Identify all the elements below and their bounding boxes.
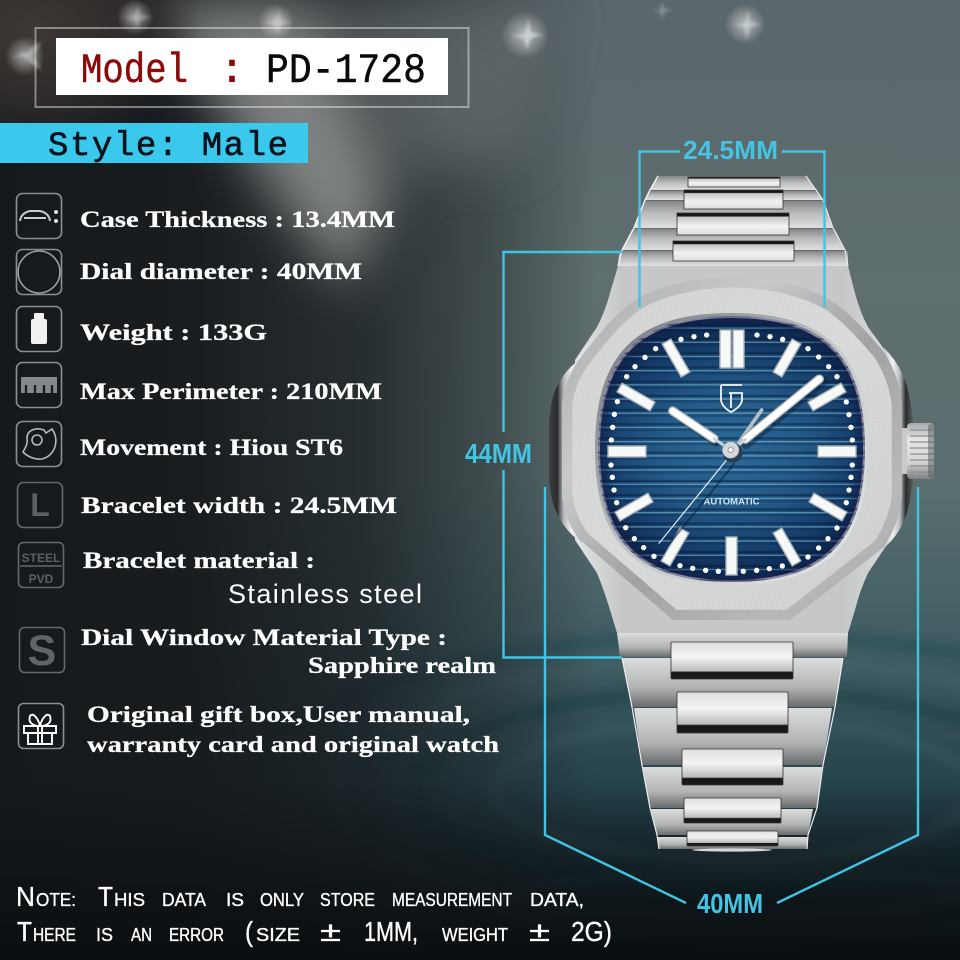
measurement note: 1MM, bbox=[364, 916, 418, 947]
24.5mm bracelet width dimension bbox=[640, 135, 824, 307]
measurement note: OTE: bbox=[36, 890, 76, 910]
measurement note: SIZE bbox=[256, 925, 300, 945]
model label: Model bbox=[81, 47, 188, 95]
icon: steel pvd: PVD bbox=[29, 572, 54, 586]
spec: bracelet material bbox=[18, 542, 422, 609]
measurement note: AN bbox=[131, 925, 152, 945]
icon: weight bbox=[16, 306, 62, 352]
spec: max perimeter: Max Perimeter : 210MM bbox=[80, 379, 382, 404]
spec: bracelet width: Bracelet width : 24.5MM bbox=[81, 493, 397, 518]
44mm case length dimension: 44MM bbox=[465, 438, 532, 469]
measurement note: ± bbox=[320, 916, 341, 947]
spec: case thickness: Case Thickness : 13.4MM bbox=[80, 207, 395, 232]
spec: package contents: warranty card and original watch bbox=[87, 732, 499, 757]
icon: steel pvd: STEEL bbox=[22, 551, 60, 565]
automatic label: AUTOMATIC bbox=[704, 496, 760, 508]
spec: package contents bbox=[18, 702, 499, 757]
icon: movement bbox=[16, 422, 62, 466]
measurement note: ONLY bbox=[260, 890, 304, 910]
spec: bracelet material: Bracelet material : bbox=[83, 548, 315, 573]
spec: dial diameter: Dial diameter : 40MM bbox=[80, 259, 362, 284]
bezel bbox=[562, 277, 902, 620]
style banner: Style: Male bbox=[48, 128, 288, 166]
spec: package contents: Original gift box,User manual, bbox=[87, 702, 470, 727]
measurement note bbox=[16, 881, 612, 947]
icon: sapphire bbox=[20, 627, 64, 675]
spec: bracelet width bbox=[18, 482, 397, 528]
measurement note: HERE bbox=[33, 925, 76, 945]
star glints bbox=[5, 0, 765, 76]
style banner bbox=[0, 123, 308, 166]
44mm case length dimension bbox=[465, 252, 622, 658]
measurement note: N bbox=[16, 881, 35, 912]
40mm case width dimension: 40MM bbox=[697, 888, 763, 919]
upper bracelet bbox=[618, 176, 848, 266]
measurement note: 2G) bbox=[571, 916, 612, 947]
icon: bracelet width: L bbox=[30, 487, 50, 523]
icon: ruler bbox=[16, 362, 62, 408]
icon: case thickness bbox=[16, 194, 62, 238]
spec: weight: Weight : 133G bbox=[80, 320, 267, 345]
spec: max perimeter bbox=[16, 362, 382, 408]
minute dots bbox=[608, 332, 855, 574]
hour markers bbox=[608, 330, 856, 575]
model label: : bbox=[220, 47, 244, 95]
watch bbox=[549, 176, 934, 852]
spec: case thickness bbox=[16, 194, 395, 238]
spec: movement: Movement : Hiou ST6 bbox=[80, 435, 343, 460]
measurement note: T bbox=[17, 916, 32, 947]
measurement note: HIS bbox=[114, 890, 145, 910]
spec: dial window material bbox=[20, 625, 496, 678]
24.5mm bracelet width dimension: 24.5MM bbox=[683, 135, 778, 165]
model label: PD-1728 bbox=[266, 47, 426, 95]
lower bracelet bbox=[617, 633, 848, 852]
measurement note: MEASUREMENT bbox=[392, 890, 512, 910]
measurement note: IS bbox=[226, 890, 244, 910]
icon: dial diameter bbox=[16, 250, 62, 294]
watch hands bbox=[659, 379, 825, 544]
dial bbox=[595, 313, 868, 585]
measurement note: ( bbox=[245, 916, 254, 947]
measurement note: WEIGHT bbox=[442, 925, 508, 945]
brand logo bbox=[721, 385, 742, 412]
measurement note: STORE bbox=[320, 890, 375, 910]
measurement note: ERROR bbox=[169, 925, 224, 945]
model label bbox=[36, 28, 468, 107]
crown bbox=[900, 423, 934, 479]
measurement note: DATA, bbox=[530, 890, 584, 910]
spec: dial window material: Dial Window Material Type : bbox=[81, 625, 447, 650]
spec: dial diameter bbox=[16, 250, 362, 294]
measurement note: IS bbox=[96, 925, 113, 945]
icon: bracelet width bbox=[18, 482, 62, 528]
icon: sapphire: S bbox=[28, 627, 56, 675]
icon: steel pvd bbox=[18, 542, 64, 588]
measurement note: DATA bbox=[162, 890, 206, 910]
spec: movement bbox=[16, 422, 343, 466]
spec: dial window material: Sapphire realm bbox=[308, 653, 496, 678]
spec: bracelet material: Stainless steel bbox=[228, 579, 422, 609]
spec: weight bbox=[16, 306, 267, 352]
icon: gift box bbox=[18, 704, 64, 748]
measurement note: ± bbox=[529, 916, 550, 947]
40mm case width dimension bbox=[545, 487, 918, 919]
measurement note: T bbox=[98, 881, 113, 912]
case lugs and sides bbox=[549, 266, 913, 633]
